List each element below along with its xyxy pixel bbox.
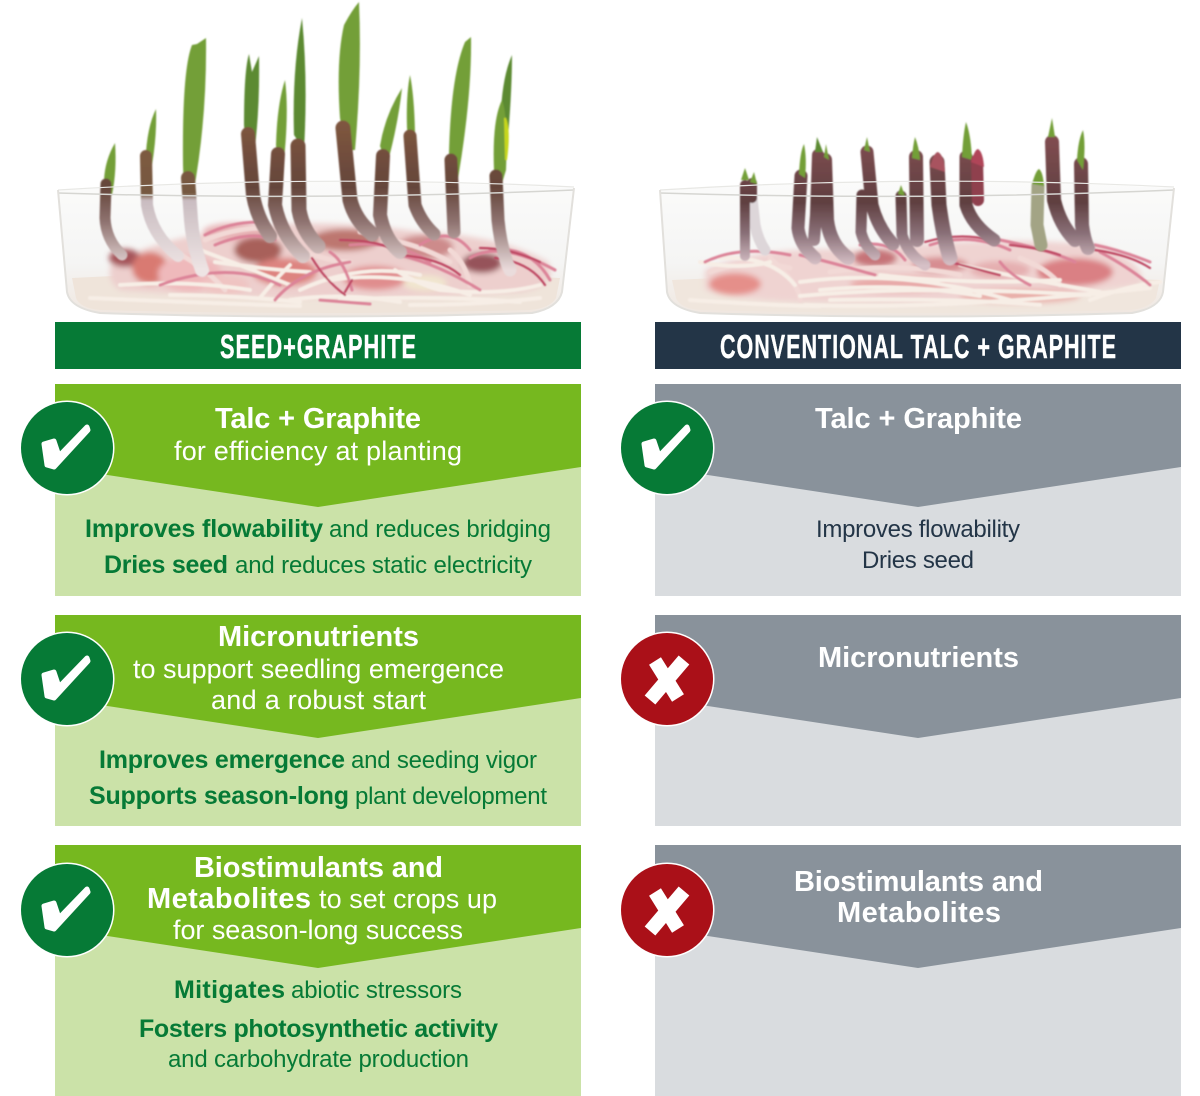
banner: left talc + graphite (55, 384, 581, 507)
heading: SEED+GRAPHITE: SEED+GRAPHITE (220, 328, 417, 365)
icon: check row 1 right (620, 400, 714, 496)
text: biostimulant benefits: Fosters photosynthetic activity (139, 1015, 498, 1043)
banner: right biostimulants: Metabolites (837, 897, 1001, 929)
banner: left biostimulants (55, 845, 581, 968)
icon: cross row 3 right (620, 862, 714, 958)
banner: left biostimulants: Metabolites (147, 883, 311, 915)
panel: right micronutrients (655, 615, 1181, 826)
text: conventional benefits: Dries seed (862, 547, 974, 574)
text: micronutrient benefits: and seeding vigor (351, 747, 537, 774)
text: micronutrient benefits (89, 746, 547, 810)
seedlings: right dish (741, 118, 1088, 265)
banner: left micronutrients: to support seedling emergence (133, 654, 504, 684)
banner: left biostimulants: Biostimulants and (194, 852, 443, 884)
banner: left micronutrients: and a robust start (211, 685, 426, 715)
panel: right biostimulants (655, 845, 1181, 1096)
panel: left talc + graphite (55, 384, 581, 596)
banner: right micronutrients: Micronutrients (818, 642, 1019, 674)
text: flowability benefits: and reduces static electricity (235, 552, 532, 579)
icon: check row 2 left (20, 632, 114, 726)
banner: left micronutrients (55, 615, 581, 738)
seedlings: left dish (104, 2, 512, 270)
banner: left talc + graphite: Talc + Graphite (215, 403, 421, 435)
banner: left talc + graphite: for efficiency at planting (174, 436, 462, 466)
text: micronutrient benefits: plant development (355, 783, 547, 810)
banner: right biostimulants (655, 845, 1181, 968)
banner: right talc + graphite (655, 384, 1181, 507)
heading: CONVENTIONAL TALC + GRAPHITE (655, 322, 1181, 369)
banner: right talc + graphite: Talc + Graphite (815, 403, 1022, 435)
banner: right micronutrients (655, 615, 1181, 738)
text: conventional benefits: Improves flowability (816, 516, 1020, 543)
text: biostimulant benefits (139, 976, 498, 1073)
heading: SEED+GRAPHITE (55, 322, 581, 369)
text: biostimulant benefits: and carbohydrate production (168, 1046, 469, 1073)
text: micronutrient benefits: Improves emergence (99, 746, 345, 774)
photo: seedlings in dish, seed+graphite (58, 2, 574, 316)
text: micronutrient benefits: Supports season-long (89, 782, 349, 810)
text: biostimulant benefits: abiotic stressors (291, 977, 462, 1004)
icon: check row 3 left (20, 862, 114, 958)
panel: right talc + graphite (655, 384, 1181, 596)
banner: right biostimulants: Biostimulants and (794, 866, 1043, 898)
banner: left biostimulants: to set crops up (319, 884, 497, 914)
photo: seedlings in dish, conventional talc + graphite (660, 118, 1174, 316)
panel: left biostimulants (55, 845, 581, 1096)
text: conventional benefits (816, 516, 1020, 574)
icon: cross row 2 right (620, 632, 714, 726)
text: flowability benefits: Dries seed (104, 551, 228, 579)
banner: left biostimulants: for season-long success (173, 915, 463, 945)
text: flowability benefits: and reduces bridging (329, 516, 551, 543)
text: flowability benefits: Improves flowability (85, 515, 323, 543)
icon: check row 1 left (20, 400, 114, 496)
banner: left micronutrients: Micronutrients (218, 621, 419, 653)
panel: left micronutrients (55, 615, 581, 826)
text: flowability benefits (85, 515, 551, 579)
text: biostimulant benefits: Mitigates (174, 976, 285, 1004)
